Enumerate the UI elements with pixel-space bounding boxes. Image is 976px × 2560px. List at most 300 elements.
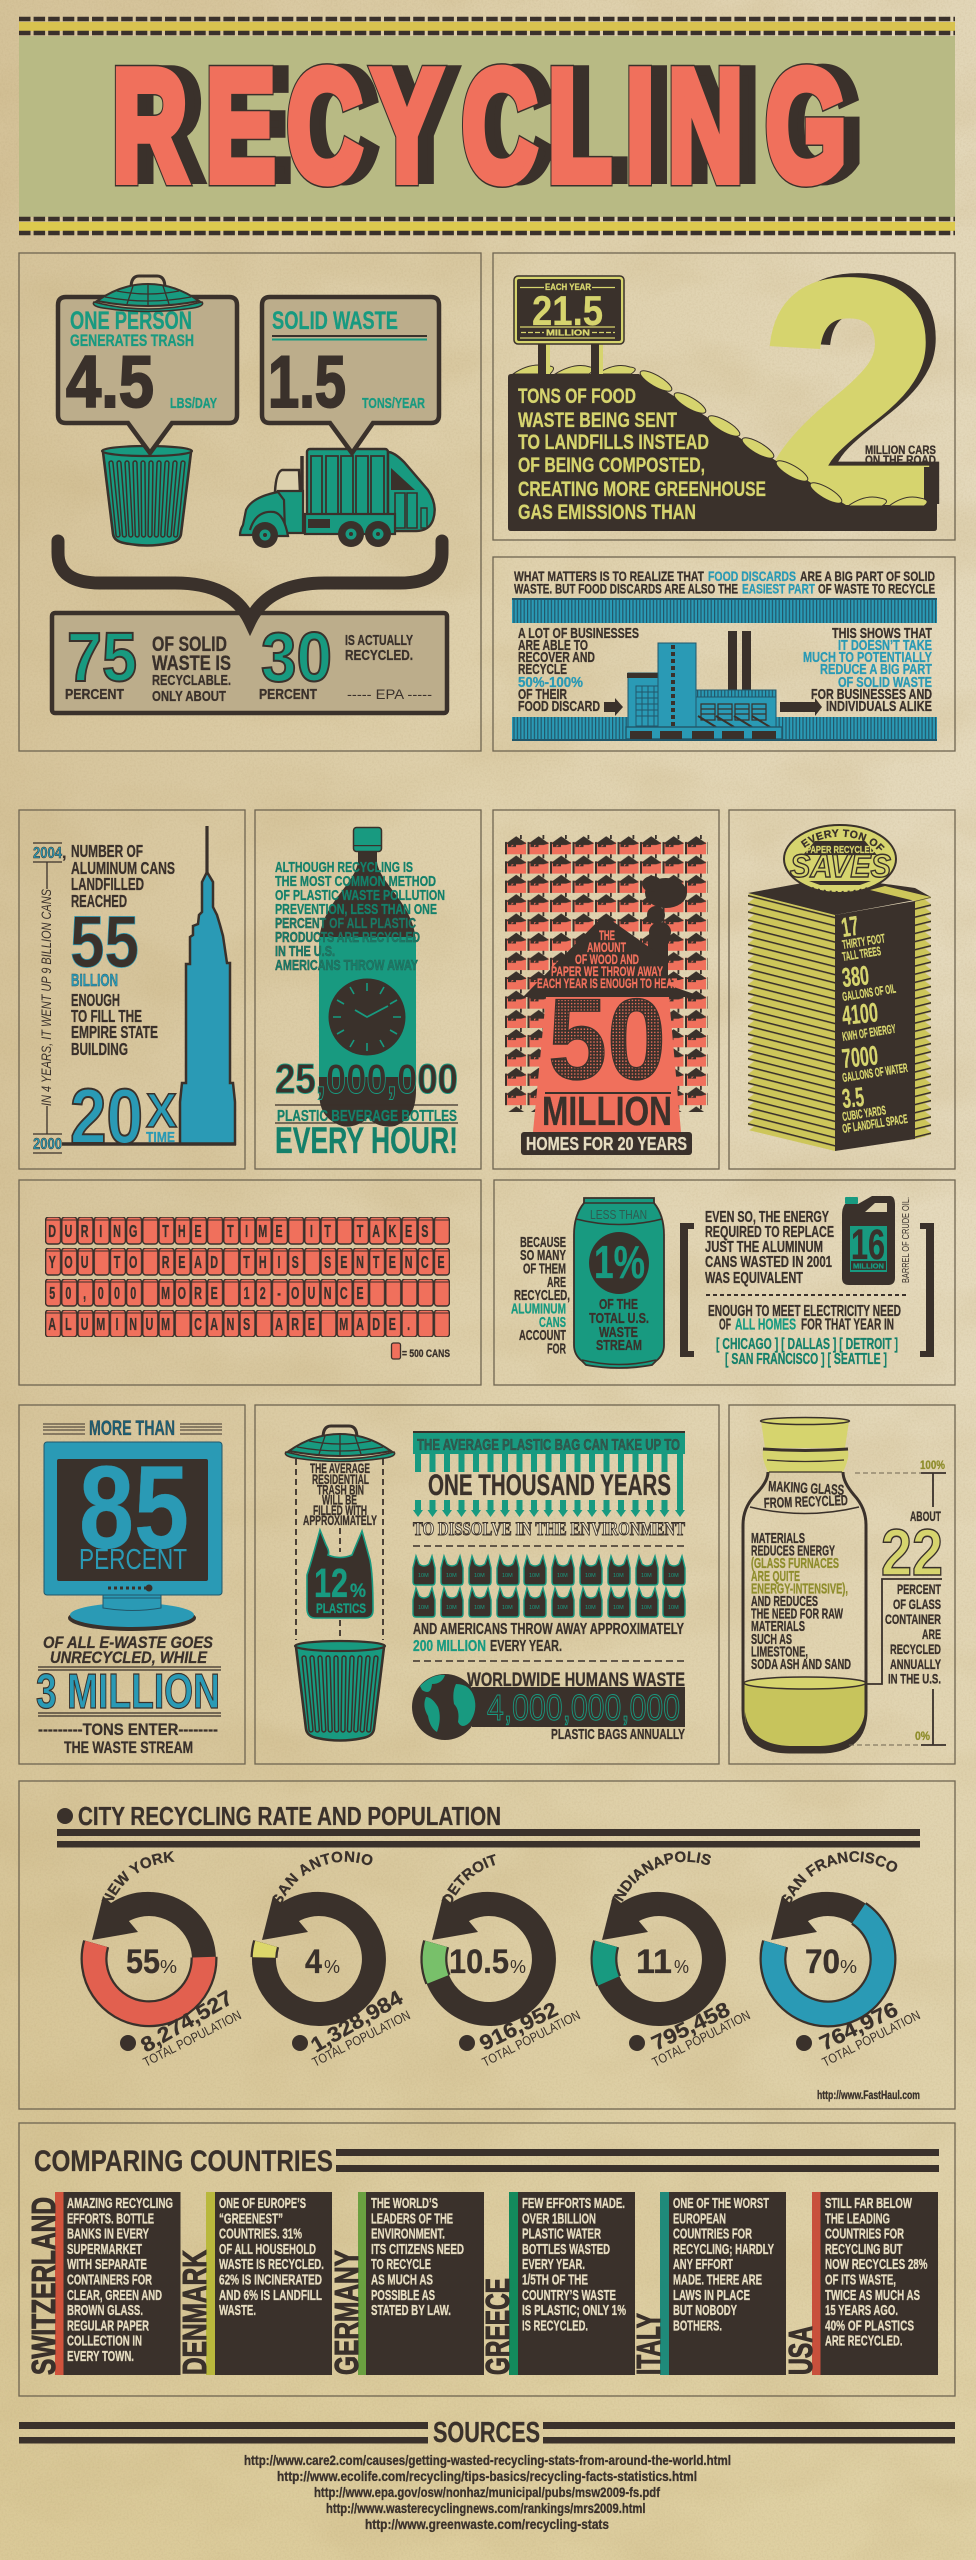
badge: every ton of paper recycled saves xyxy=(783,824,897,892)
country: denmark: “GREENEST” xyxy=(219,2211,283,2227)
stats box: PERCENT xyxy=(259,686,317,703)
stats on stack: GALLONS OF WATER xyxy=(841,1061,909,1085)
country: greece: GREECE xyxy=(479,2278,516,2375)
icon: trash lid xyxy=(93,276,203,312)
country: italy: BUT NOBODY xyxy=(673,2303,737,2319)
callout: one person: ONE PERSON xyxy=(70,307,192,335)
icon: aluminum can xyxy=(574,1198,664,1368)
text: making glass: MAKING GLASS xyxy=(768,1479,845,1499)
text: tons of food waste: WASTE BEING SENT xyxy=(518,409,677,432)
text: although recycling: PRODUCTS ARE RECYCLED xyxy=(275,929,420,946)
text: number of aluminum cans: NUMBER OF xyxy=(71,841,143,861)
scale: 0 to 100 percent: 0% xyxy=(915,1729,930,1743)
heading: every hour: EVERY HOUR! xyxy=(275,1120,458,1161)
bag grid: 10M each: 10M xyxy=(613,1605,624,1611)
waste mounds xyxy=(513,365,927,507)
country: greece xyxy=(479,2192,635,2375)
text: tons of food waste: OF BEING COMPOSTED, xyxy=(518,454,705,477)
label: million cars: ON THE ROAD xyxy=(865,453,936,467)
heading: sources xyxy=(19,2417,955,2449)
stats on stack: CUBIC YARDS xyxy=(841,1103,887,1124)
year markers and timeline: IN 4 YEARS, IT WENT UP 9 BILLION CANS xyxy=(39,889,54,1106)
text: about 22 percent: ABOUT xyxy=(910,1508,941,1524)
country: greece: IS RECYCLED. xyxy=(522,2318,588,2334)
text: because so many: OF THEM xyxy=(523,1260,566,1278)
text: tons enter: ---------TONS ENTER-------- xyxy=(38,1720,218,1739)
country: italy: ITALY xyxy=(630,2313,667,2375)
donut: new york xyxy=(80,1851,218,2028)
badge: every ton of paper recycled saves: SAVES xyxy=(790,848,892,884)
donut: san antonio: % xyxy=(324,1957,340,1977)
country: greece: COUNTRY’S WASTE xyxy=(522,2288,616,2304)
year markers and timeline xyxy=(33,843,66,1153)
divider dashes xyxy=(706,1294,906,1296)
panel: food discards xyxy=(493,557,955,751)
donut: san francisco: 70 xyxy=(805,1943,840,1981)
country: germany: ENVIRONMENT. xyxy=(371,2227,445,2243)
donut: san antonio: SAN ANTONIO xyxy=(272,1851,372,1903)
icon: large house with smoke xyxy=(523,876,703,1132)
label: barrel of crude oil: BARREL OF CRUDE OIL. xyxy=(900,1197,912,1283)
country: usa: ARE RECYCLED. xyxy=(825,2334,902,2350)
text: about 22 percent xyxy=(881,1508,943,1686)
bag grid: 10M each: 10M xyxy=(557,1605,568,1611)
bag grid: 10M each: 10M xyxy=(668,1573,679,1579)
sentence on cans xyxy=(48,1222,445,1335)
panel: e-waste xyxy=(19,1405,245,1764)
text: amount of wood and paper: AMOUNT xyxy=(587,939,626,955)
icon: oil jug: MILLION xyxy=(853,1262,884,1270)
scale: 0 to 100 percent xyxy=(849,1458,946,1745)
country: switzerland xyxy=(25,2192,180,2375)
text: because so many: ALUMINUM xyxy=(511,1300,566,1318)
text: businesses recover: ARE ABLE TO xyxy=(518,638,588,654)
text: materials reduces energy: THE NEED FOR RAW xyxy=(751,1606,843,1622)
text: although recycling: PREVENTION, LESS THAN ONE xyxy=(275,901,437,918)
donut: detroit xyxy=(420,1854,556,2026)
donut: new york: 55 xyxy=(126,1943,160,1981)
sentence on cans: ALUMINUM CANS ARE MADE. xyxy=(48,1315,410,1335)
panel: comparing countries xyxy=(19,2123,955,2396)
stats box: 30 xyxy=(261,618,332,696)
icon: plastic bag 12% xyxy=(307,1530,373,1618)
heading xyxy=(57,1801,920,1848)
text: amount of wood and paper xyxy=(537,927,677,991)
donut: detroit: DETROIT xyxy=(442,1854,496,1903)
icon: computer monitor xyxy=(44,1442,222,1631)
country: denmark: AND 6% IS LANDFILL xyxy=(219,2288,322,2304)
country: greece: EVERY YEAR. xyxy=(522,2257,585,2273)
icon: oil jug xyxy=(842,1196,895,1285)
country: denmark: OF ALL HOUSEHOLD xyxy=(219,2242,316,2258)
country: greece: BOTTLES WASTED xyxy=(522,2242,610,2258)
year markers and timeline: 2000 xyxy=(33,1136,62,1153)
brackets xyxy=(680,1223,934,1357)
callout: one person: 4.5 xyxy=(66,342,154,423)
country: germany: THE WORLD’S xyxy=(371,2196,438,2212)
country: italy: LAWS IN PLACE xyxy=(673,2288,750,2304)
bag grid: 10M each: 10M xyxy=(502,1573,513,1579)
icon: globe xyxy=(412,1674,478,1740)
text: this shows that: IT DOESN’T TAKE xyxy=(838,638,932,654)
donut: new york: % xyxy=(160,1957,177,1977)
text: about 22 percent: IN THE U.S. xyxy=(888,1670,941,1686)
text: about 22 percent: 22 xyxy=(881,1515,943,1589)
bag grid: 10M each: 10M xyxy=(418,1605,429,1611)
worldwide humans waste xyxy=(467,1670,685,1743)
country: greece: 1/5TH OF THE xyxy=(522,2272,588,2288)
country: usa: RECYCLING BUT xyxy=(825,2242,903,2258)
country: denmark: COUNTRIES. 31% xyxy=(219,2227,302,2243)
text: although recycling: PERCENT OF ALL PLASTIC xyxy=(275,915,416,932)
text: businesses recover: FOOD DISCARD xyxy=(518,699,600,715)
donut: san francisco xyxy=(759,1851,898,2028)
country: germany: TO RECYCLE xyxy=(371,2257,431,2273)
text: this shows that: OF SOLID WASTE xyxy=(838,675,932,691)
text: number of aluminum cans: ENOUGH xyxy=(71,990,120,1010)
text: materials reduces energy: ENERGY-INTENSIVE), xyxy=(751,1582,848,1598)
text: materials reduces energy: MATERIALS xyxy=(751,1619,805,1635)
country: usa: TWICE AS MUCH AS xyxy=(825,2288,920,2304)
country: usa: COUNTRIES FOR xyxy=(825,2227,904,2243)
source links: http://www.greenwaste.com/recycling-stats xyxy=(365,2516,609,2532)
text: materials reduces energy: (GLASS FURNACES xyxy=(751,1556,839,1572)
text: this shows that xyxy=(803,626,932,715)
text: average residential bin: RESIDENTIAL xyxy=(312,1471,369,1487)
arrows xyxy=(413,1454,685,1517)
text: tons of food waste: TO LANDFILLS INSTEAD xyxy=(518,431,709,454)
country: denmark: WASTE. xyxy=(219,2303,256,2319)
country: germany xyxy=(328,2192,484,2375)
panel: homes heated xyxy=(493,810,719,1169)
country: usa: USA xyxy=(782,2326,819,2375)
title: RECYCLING: RECYCLING xyxy=(112,38,847,214)
stats on stack: 4100 xyxy=(840,997,879,1031)
text: making glass: FROM RECYCLED xyxy=(764,1493,848,1512)
callout: solid waste: TONS/YEAR xyxy=(362,396,425,412)
text: tons of food waste: GAS EMISSIONS THAN xyxy=(518,501,696,524)
sign: each year 21.5 million: EACH YEAR xyxy=(545,282,591,292)
country: denmark xyxy=(176,2192,332,2375)
callout: solid waste xyxy=(262,297,439,453)
text: materials reduces energy: AND REDUCES xyxy=(751,1594,818,1610)
dashed guides xyxy=(296,1459,383,1645)
text: this shows that: THIS SHOWS THAT xyxy=(832,626,932,642)
20x time: X xyxy=(146,1085,177,1138)
rule xyxy=(545,1092,671,1094)
big number 2: 2 xyxy=(760,215,939,574)
text: although recycling xyxy=(275,859,445,974)
bag grid: 10M each xyxy=(413,1556,685,1617)
country: usa: NOW RECYCLES 28% xyxy=(825,2257,928,2273)
country: denmark: DENMARK xyxy=(176,2250,213,2375)
number: 50: 50 xyxy=(548,976,666,1104)
icon: clock xyxy=(328,978,406,1056)
stats box: 75 xyxy=(67,618,137,696)
text: americans throw away: EVERY YEAR. xyxy=(490,1638,562,1655)
country: usa: OF ITS WASTE, xyxy=(825,2272,896,2288)
population labels: TOTAL POPULATION xyxy=(650,2007,753,2070)
population labels: 1,328,984 xyxy=(307,1986,407,2057)
scale: 0 to 100 percent: 100% xyxy=(920,1458,945,1472)
icon: aluminum can: LESS THAN xyxy=(590,1207,647,1222)
bag grid: 10M each: 10M xyxy=(557,1573,568,1579)
bag grid: 10M each: 10M xyxy=(585,1605,596,1611)
icon: trash can xyxy=(295,1641,385,1740)
source links: http://www.epa.gov/osw/nonhaz/municipal/pubs/msw2009-fs.pdf xyxy=(314,2484,660,2500)
bag grid: 10M each: 10M xyxy=(641,1573,652,1579)
country: germany: AS MUCH AS xyxy=(371,2272,433,2288)
icon: trash can xyxy=(102,446,192,546)
heading: one thousand years: ONE THOUSAND YEARS xyxy=(428,1469,671,1502)
stats box: ----- EPA ----- xyxy=(347,686,432,702)
bag grid: 10M each: 10M xyxy=(474,1573,485,1579)
country: italy: ONE OF THE WORST xyxy=(673,2196,769,2212)
icon: garbage truck xyxy=(240,449,435,548)
country: italy: COUNTRIES FOR xyxy=(673,2227,752,2243)
rules xyxy=(275,1105,458,1123)
stats on stack: TALL TREES xyxy=(841,944,882,964)
ground line xyxy=(62,1142,236,1146)
text: even so the energy xyxy=(705,1209,834,1287)
donut: indianapolis: 11 xyxy=(636,1943,672,1981)
panel: city recycling rate xyxy=(18,1780,956,2110)
country: greece: FEW EFFORTS MADE. xyxy=(522,2196,625,2212)
icon: aluminum can: TOTAL U.S. xyxy=(589,1310,649,1327)
text: this shows that: MUCH TO POTENTIALLY xyxy=(803,650,932,666)
callout: one person: LBS/DAY xyxy=(170,396,217,412)
stats on stack: 7000 xyxy=(840,1040,879,1074)
icon: paper stack xyxy=(748,877,931,1151)
stats on stack: 17 xyxy=(839,911,861,943)
text: because so many: CANS xyxy=(539,1314,566,1331)
panel: aluminum cans empire state xyxy=(19,810,245,1169)
population labels: TOTAL POPULATION xyxy=(820,2007,923,2070)
sentence on cans: DURING THE TIME IT TAKES xyxy=(48,1222,428,1242)
donut: san antonio xyxy=(250,1851,386,2026)
country: germany: STATED BY LAW. xyxy=(371,2303,451,2319)
text: materials reduces energy: SODA ASH AND SAND xyxy=(751,1657,851,1673)
credit: http://www.FastHaul.com xyxy=(817,2090,920,2102)
population labels: TOTAL POPULATION xyxy=(310,2007,413,2070)
label: million cars xyxy=(865,443,936,467)
population labels: 764,976 xyxy=(816,1998,902,2055)
text: amount of wood and paper: EACH YEAR IS ENOUGH TO HEAT xyxy=(537,975,677,991)
icon: trash lid xyxy=(285,1426,395,1462)
donut: indianapolis: INDIANAPOLIS xyxy=(611,1851,711,1903)
sign: each year 21.5 million: 21.5 xyxy=(532,287,603,334)
stats on stack: GALLONS OF OIL xyxy=(841,982,897,1004)
sentence on cans: YOU TO READ THIS SENTENCE xyxy=(49,1253,445,1273)
country: switzerland: CONTAINERS FOR xyxy=(67,2272,152,2288)
label: million cars: MILLION CARS xyxy=(865,443,936,457)
icon: aluminum can: OF THE xyxy=(599,1296,638,1313)
stats box: ONLY ABOUT xyxy=(152,688,226,705)
stats box: OF SOLID xyxy=(152,633,227,656)
donut: san antonio: 4 xyxy=(305,1943,322,1981)
title: RECYCLING: RECYCLING xyxy=(112,38,847,214)
stats box: IS ACTUALLY xyxy=(345,633,413,649)
text: tons of food waste: TONS OF FOOD xyxy=(518,385,636,408)
title banner xyxy=(19,19,955,233)
text: although recycling: AMERICANS THROW AWAY xyxy=(275,957,418,974)
stats box: WASTE IS xyxy=(152,652,231,675)
text: although recycling: THE MOST COMMON METHOD xyxy=(275,873,436,890)
text: tons of food waste: CREATING MORE GREENHOUSE xyxy=(518,478,766,501)
bag grid: 10M each: 10M xyxy=(613,1573,624,1579)
icon: factory xyxy=(626,631,782,739)
legend: 500 cans xyxy=(392,1343,450,1360)
text: although recycling: IN THE U.S. xyxy=(275,943,335,960)
intro text xyxy=(514,568,935,596)
banner: average plastic bag xyxy=(413,1431,685,1454)
country: italy: EUROPEAN xyxy=(673,2211,726,2227)
text: enough to meet electricity: ALL HOMES xyxy=(735,1316,796,1334)
stats box: RECYCLED. xyxy=(345,647,413,664)
country: germany: ITS CITIZENS NEED xyxy=(371,2242,464,2258)
text: this shows that: FOR BUSINESSES AND xyxy=(811,687,932,703)
country: switzerland: EFFORTS. BOTTLE xyxy=(67,2211,154,2227)
source links: http://www.ecolife.com/recycling/tips-basics/recycling-facts-statistics.html xyxy=(277,2468,697,2484)
text: materials reduces energy xyxy=(751,1531,851,1673)
text: tons of food waste xyxy=(518,385,766,524)
text: because so many: BECAUSE xyxy=(520,1234,566,1251)
country: switzerland: WITH SEPARATE xyxy=(67,2257,147,2273)
country: italy: RECYCLING; HARDLY xyxy=(673,2242,774,2258)
text: because so many: ACCOUNT xyxy=(519,1327,566,1344)
arrow xyxy=(604,698,623,716)
bag grid: 10M each: 10M xyxy=(585,1573,596,1579)
country: denmark: WASTE IS RECYCLED. xyxy=(219,2257,324,2273)
divider dashes xyxy=(413,1546,685,1661)
year markers and timeline: , xyxy=(62,845,66,862)
heading: COMPARING COUNTRIES xyxy=(34,2145,333,2178)
hill xyxy=(508,374,937,531)
heading: more than: MORE THAN xyxy=(89,1417,175,1440)
heading xyxy=(34,2145,939,2178)
country: usa: THE LEADING xyxy=(825,2211,890,2227)
text: making glass xyxy=(764,1479,848,1512)
badge: every ton of paper recycled saves: PAPER RECYCLED xyxy=(806,844,875,856)
stats on stack: KWH OF ENERGY xyxy=(841,1022,897,1044)
text: of all e-waste: UNRECYCLED, WHILE xyxy=(50,1648,208,1667)
stats on stack: 3.5 xyxy=(840,1082,866,1114)
text: average residential bin: THE AVERAGE xyxy=(310,1460,370,1476)
text: number of aluminum cans: REACHED xyxy=(71,891,127,911)
text: even so the energy: CANS WASTED IN 2001 xyxy=(705,1254,832,1271)
sign: each year 21.5 million: MILLION xyxy=(546,328,590,338)
text: number of aluminum cans: BUILDING xyxy=(71,1039,128,1059)
country: denmark: ONE OF EUROPE’S xyxy=(219,2196,306,2212)
20x time: TIME xyxy=(146,1130,175,1146)
country: usa: 15 YEARS AGO. xyxy=(825,2303,898,2319)
20x time: 20 xyxy=(70,1072,143,1160)
text: number of aluminum cans: BILLION xyxy=(71,970,118,990)
text: because so many xyxy=(511,1234,570,1358)
rules xyxy=(38,1667,221,1716)
number: 3 million: 3 MILLION xyxy=(36,1665,220,1719)
country: germany: GERMANY xyxy=(328,2250,365,2375)
stats on stack: OF LANDFILL SPACE xyxy=(841,1112,909,1136)
text: because so many: FOR xyxy=(547,1340,566,1358)
panel: glass jar xyxy=(729,1405,955,1764)
bag grid: 10M each: 10M xyxy=(529,1605,540,1611)
text: about 22 percent: CONTAINER xyxy=(885,1611,941,1627)
text: about 22 percent: ARE xyxy=(922,1626,941,1642)
icon: plastic bottle xyxy=(319,828,416,1127)
text: even so the energy: WAS EQUIVALENT xyxy=(705,1270,803,1287)
heading: sources: SOURCES xyxy=(433,2417,540,2449)
stats box: PERCENT xyxy=(65,686,124,703)
icon: computer monitor: 85 xyxy=(79,1442,189,1574)
icon: plastic bag 12%: % xyxy=(350,1581,366,1602)
stats on stack: 380 xyxy=(840,960,870,993)
icon: glass jar xyxy=(743,1418,866,1753)
icon: aluminum can: STREAM xyxy=(596,1337,642,1354)
population labels: TOTAL POPULATION xyxy=(480,2007,583,2070)
text: million: MILLION xyxy=(542,1088,672,1134)
text: even so the energy: JUST THE ALUMINUM xyxy=(705,1239,823,1256)
country: italy: MADE. THERE ARE xyxy=(673,2272,762,2288)
text: enough to meet electricity: OF xyxy=(719,1316,731,1334)
bag grid: 10M each: 10M xyxy=(641,1605,652,1611)
badge: every ton of paper recycled saves: EVERY TON OF xyxy=(800,829,885,850)
text: businesses recover: A LOT OF BUSINESSES xyxy=(518,626,639,642)
icon: plastic bag 12%: 12 xyxy=(314,1560,348,1606)
country: italy: BOTHERS. xyxy=(673,2318,722,2334)
striped bands xyxy=(512,598,937,741)
bag grid: 10M each: 10M xyxy=(446,1605,457,1611)
population labels: 916,952 xyxy=(476,1998,562,2055)
text: americans throw away: 200 MILLION xyxy=(413,1638,486,1655)
country: switzerland: EVERY TOWN. xyxy=(67,2349,134,2365)
icon: plastic bag 12%: PLASTICS xyxy=(316,1601,366,1616)
country: greece: PLASTIC WATER xyxy=(522,2227,601,2243)
text: average residential bin xyxy=(303,1460,377,1528)
text: number of aluminum cans: ALUMINUM CANS xyxy=(71,858,175,878)
panel: food waste xyxy=(493,211,955,574)
text: average residential bin: FILLED WITH xyxy=(313,1502,367,1518)
panel: aluminum can energy xyxy=(494,1180,955,1385)
country: switzerland: COLLECTION IN xyxy=(67,2334,142,2350)
population labels: TOTAL POPULATION xyxy=(141,2007,244,2070)
text: americans throw away: AND AMERICANS THROW AWAY APPROXIMATELY xyxy=(413,1621,684,1638)
icon: aluminum can: 1% xyxy=(594,1236,645,1288)
text: about 22 percent: RECYCLED xyxy=(890,1641,941,1657)
banner: average plastic bag: THE AVERAGE PLASTIC BAG CAN TAKE UP TO xyxy=(417,1437,680,1454)
source links: http://www.wasterecyclingnews.com/rankings/mrs2009.html xyxy=(326,2500,646,2516)
country: greece: OVER 1BILLION xyxy=(522,2211,596,2227)
country: switzerland: BROWN GLASS. xyxy=(67,2303,143,2319)
text: about 22 percent: OF GLASS xyxy=(893,1596,941,1612)
text: of all e-waste xyxy=(43,1633,214,1667)
country: usa xyxy=(782,2192,938,2375)
worldwide humans waste: PLASTIC BAGS ANNUALLY xyxy=(551,1727,685,1743)
panel: trash per person and solid waste xyxy=(19,253,481,751)
text: of all e-waste: OF ALL E-WASTE GOES xyxy=(43,1633,214,1652)
text: enough to meet electricity: [ SAN FRANCISCO ] [ SEATTLE ] xyxy=(725,1351,887,1368)
text: americans throw away xyxy=(413,1621,684,1655)
bag grid: 10M each: 10M xyxy=(529,1573,540,1579)
country: germany: LEADERS OF THE xyxy=(371,2211,453,2227)
country: switzerland: SWITZERLAND xyxy=(25,2197,62,2375)
label: homes for 20 years: HOMES FOR 20 YEARS xyxy=(526,1134,687,1154)
donut: indianapolis: % xyxy=(674,1957,689,1977)
bag grid: 10M each: 10M xyxy=(474,1605,485,1611)
text: businesses recover xyxy=(518,626,639,715)
text: because so many: ARE xyxy=(547,1274,566,1291)
legend: 500 cans: = 500 CANS xyxy=(402,1348,450,1360)
